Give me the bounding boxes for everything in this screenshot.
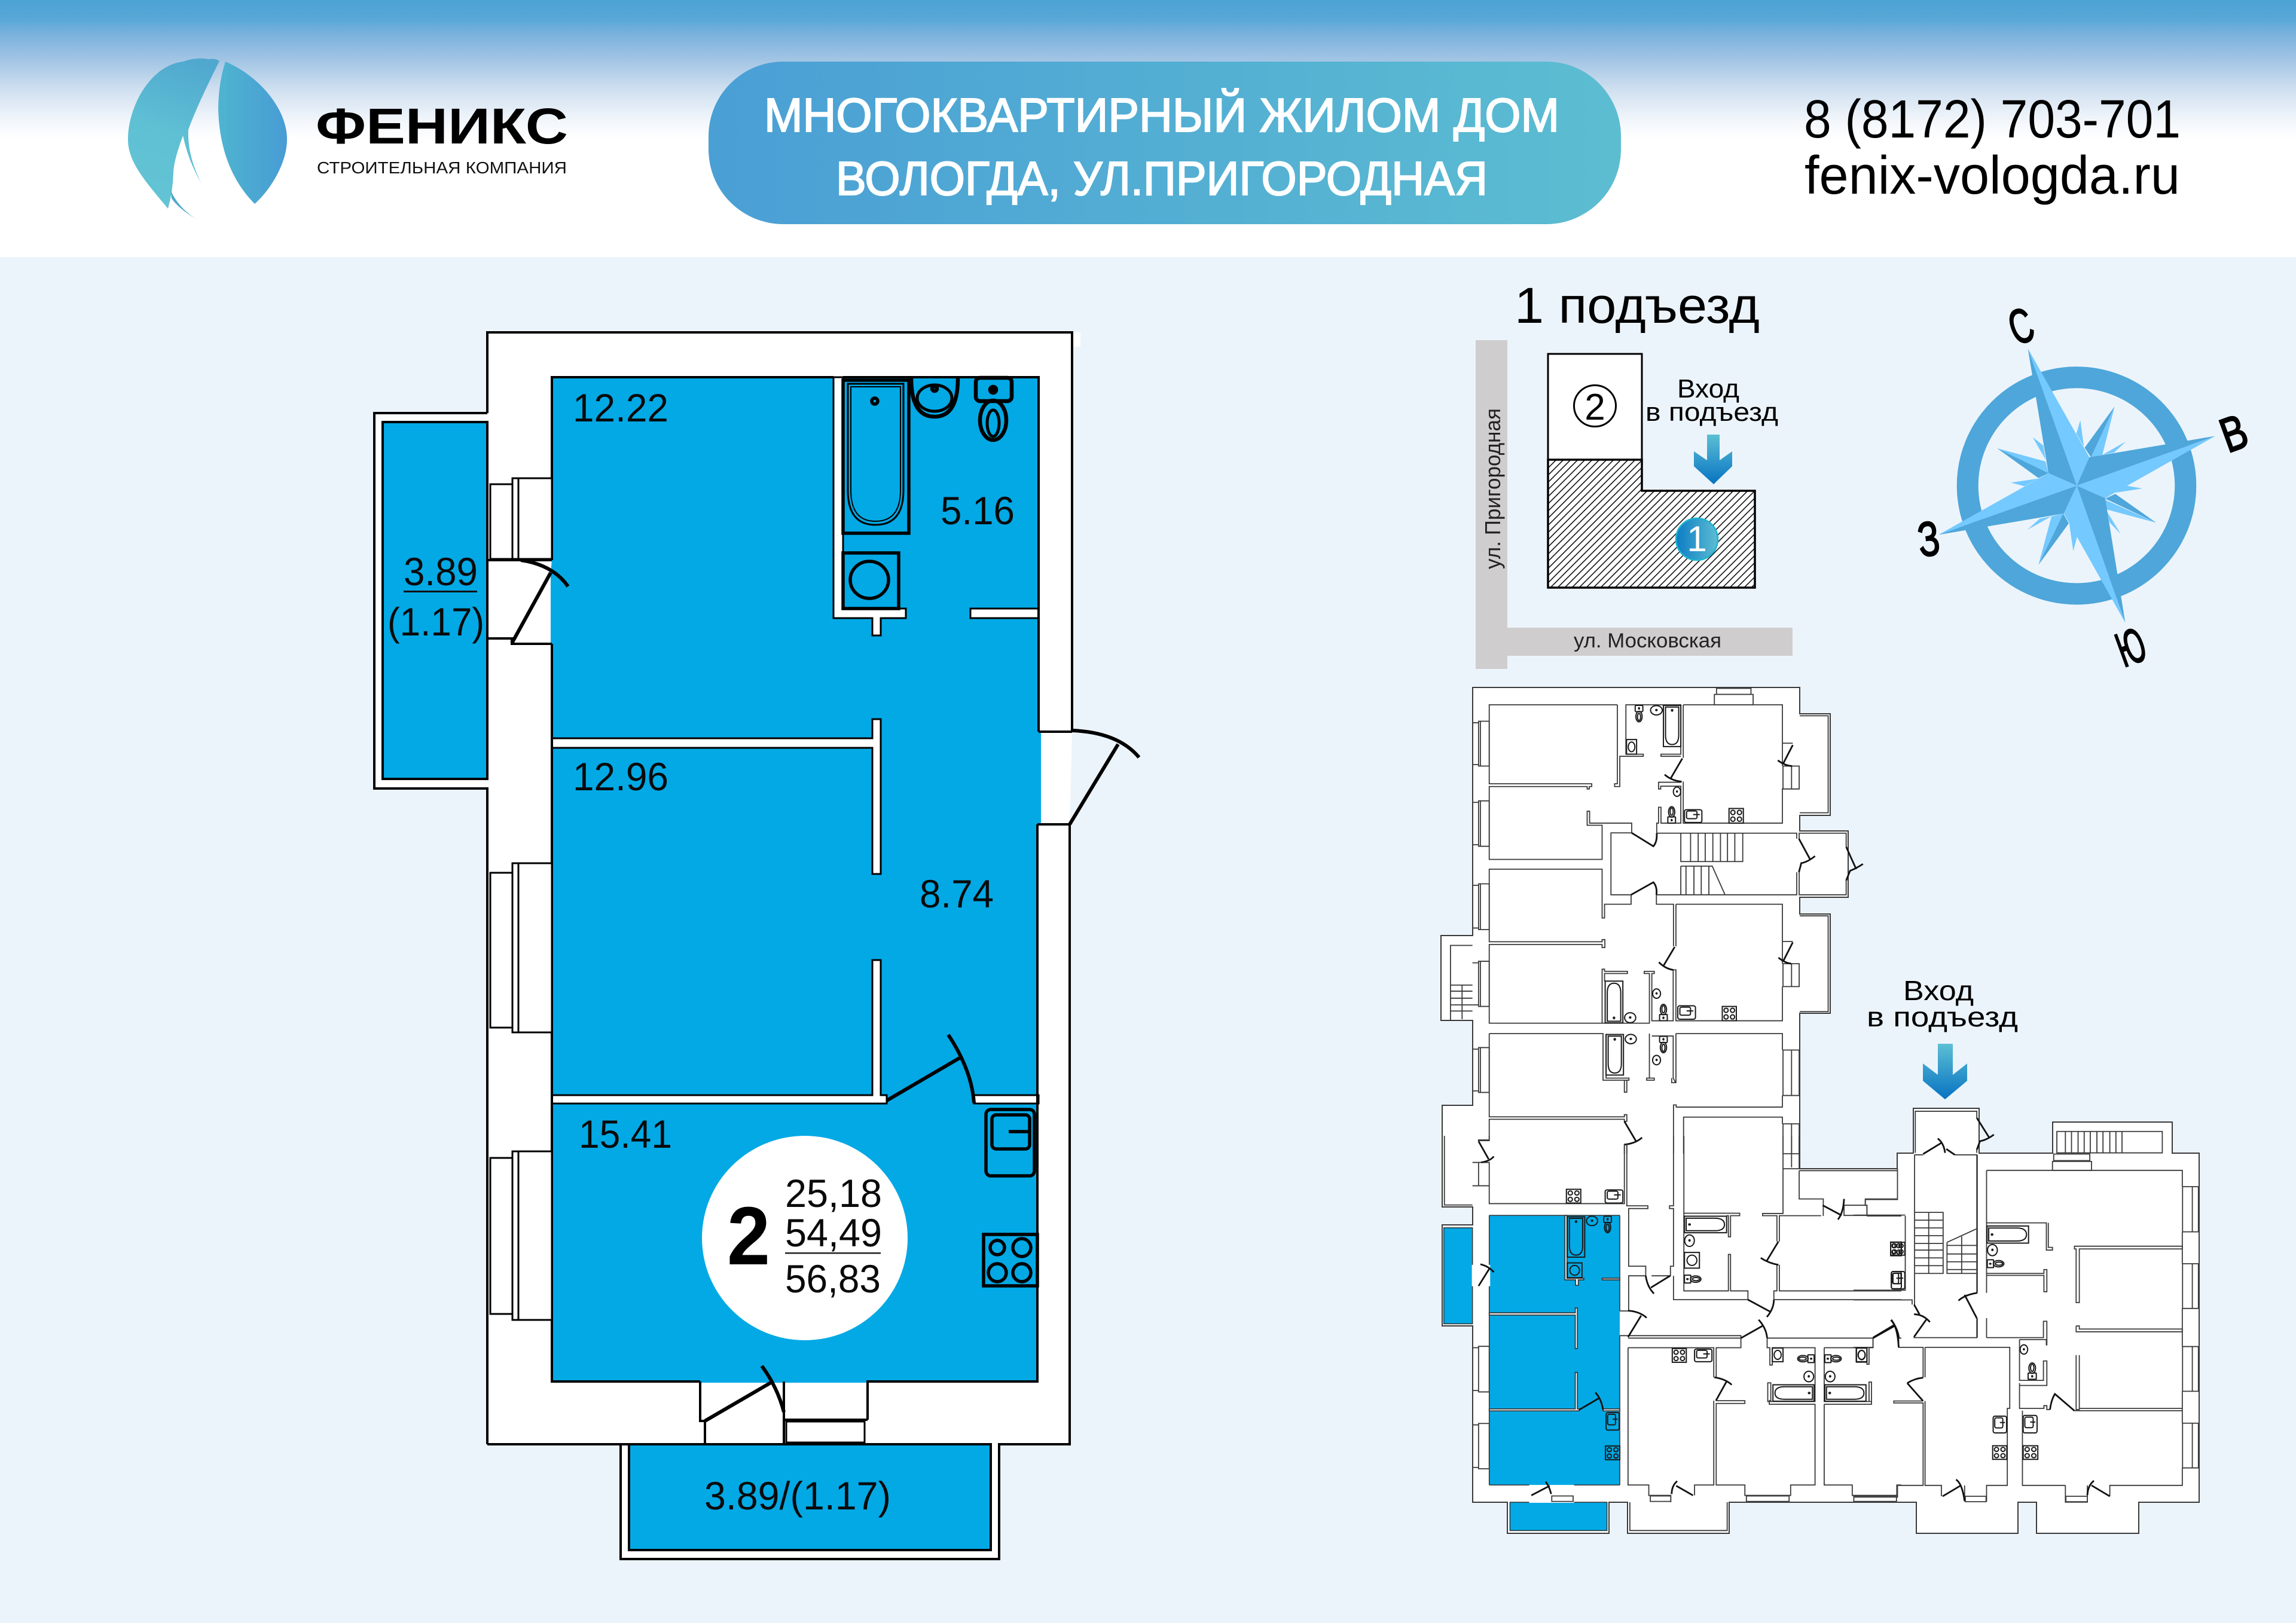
building section 2 — [1548, 354, 1642, 460]
outer wall outline — [374, 332, 1072, 1559]
entrance label: key plan: в подъезд — [1867, 1001, 2018, 1032]
doors — [1873, 1118, 2110, 1501]
doors — [1479, 1141, 1899, 1496]
street label: Московская: ул. Московская — [1574, 629, 1721, 652]
title line 2: ВОЛОГДА, УЛ.ПРИГОРОДНАЯ — [836, 152, 1488, 205]
arrow: entrance — [1694, 435, 1732, 484]
building section 1 hatched: 1 — [1687, 519, 1707, 559]
entrance label: key plan — [1867, 975, 2018, 1032]
room area: 8.74: 8.74 — [920, 872, 994, 916]
icon: toilet — [976, 378, 1012, 440]
header band — [0, 0, 2296, 257]
building footprint — [1441, 687, 2199, 1533]
fixtures — [1857, 1226, 2038, 1459]
stairs — [1915, 1132, 2162, 1273]
windows — [1473, 1136, 1799, 1469]
panel: floor key plan — [1441, 687, 2199, 1533]
compass letter west: З — [1915, 511, 1943, 567]
windows — [2182, 1187, 2199, 1468]
balcony area: left: 3.89 — [404, 549, 478, 594]
balcony area: left — [387, 549, 484, 644]
website: fenix-vologda.ru — [1805, 146, 2180, 206]
balcony area: left: (1.17) — [387, 600, 484, 644]
compass letter south: Ю — [2109, 618, 2153, 677]
entrance label: в подъезд — [1645, 398, 1778, 427]
living area: 25,18 — [785, 1171, 882, 1215]
fixtures — [1605, 705, 1744, 1075]
left balcony — [383, 422, 487, 779]
icon: kitchen sink — [986, 1109, 1034, 1176]
total area: 54,49 — [785, 1211, 882, 1255]
icon: phoenix feathers — [128, 59, 287, 219]
heading: entrance number: 1 подъезд — [1515, 277, 1760, 334]
compass rose — [1915, 298, 2255, 677]
contacts — [1804, 90, 2181, 206]
doors — [512, 560, 1139, 1421]
doors — [1625, 745, 1863, 1145]
compass star — [1938, 349, 2215, 623]
panel: apartment floor plan — [374, 332, 1139, 1559]
icon: stove — [984, 1234, 1037, 1286]
apartment summary circle — [702, 1136, 908, 1340]
windows — [1473, 722, 1799, 1154]
middle part of building with highlighted apartment — [1444, 1136, 1901, 1530]
compass ring — [1968, 377, 2185, 594]
room count: 2 — [727, 1190, 770, 1282]
room area: 5.16: 5.16 — [941, 488, 1015, 533]
compass letter east: В — [2213, 404, 2255, 463]
bay and stairs — [1451, 833, 1743, 1019]
arrow: key plan entrance — [1923, 1044, 1967, 1099]
icon: washing machine — [843, 553, 899, 609]
street label: Пригородная: ул. Пригородная — [1480, 408, 1505, 569]
windows — [490, 478, 865, 1442]
balcony area: bottom: 3.89/(1.17) — [704, 1474, 891, 1518]
entrance label: key plan: Вход — [1903, 975, 1974, 1006]
site map — [1476, 340, 1793, 669]
room area: 12.22: 12.22 — [573, 386, 668, 430]
upper part of building — [1451, 688, 1863, 1154]
logo name: ФЕНИКС — [316, 98, 568, 154]
right part of building — [1854, 1111, 2199, 1502]
building section 2: 2 — [1584, 387, 1605, 428]
icon: bath — [843, 380, 909, 533]
room outline — [487, 377, 1072, 1444]
interior walls — [552, 377, 1039, 1104]
road: ул. Пригородная — [1476, 340, 1507, 669]
highlighted apartment — [1444, 1215, 1620, 1530]
title pill — [709, 62, 1621, 224]
room area: 12.96: 12.96 — [573, 754, 668, 799]
fixtures — [1567, 1190, 1901, 1460]
bottom balcony — [629, 1444, 991, 1550]
sanitary and kitchen fixtures — [843, 378, 1037, 1286]
entrance label: Вход — [1677, 374, 1739, 404]
road: ул. Московская — [1507, 628, 1793, 656]
area with balcony: 56,83 — [785, 1257, 881, 1301]
room area: 15.41: 15.41 — [579, 1112, 672, 1156]
building section 1 hatched — [1548, 460, 1755, 588]
compass letter north: С — [2001, 298, 2041, 356]
logo tagline: СТРОИТЕЛЬНАЯ КОМПАНИЯ — [317, 158, 567, 177]
entrance label — [1645, 374, 1778, 427]
title line 1: МНОГОКВАРТИРНЫЙ ЖИЛОМ ДОМ — [764, 88, 1559, 142]
white gaps of apartment — [1472, 1265, 1628, 1503]
phone: 8 (8172) 703-701 — [1804, 90, 2181, 149]
icon: washbasin — [911, 378, 958, 417]
apartment floor fill — [551, 377, 1041, 1383]
logo: Феникс — [128, 59, 568, 219]
